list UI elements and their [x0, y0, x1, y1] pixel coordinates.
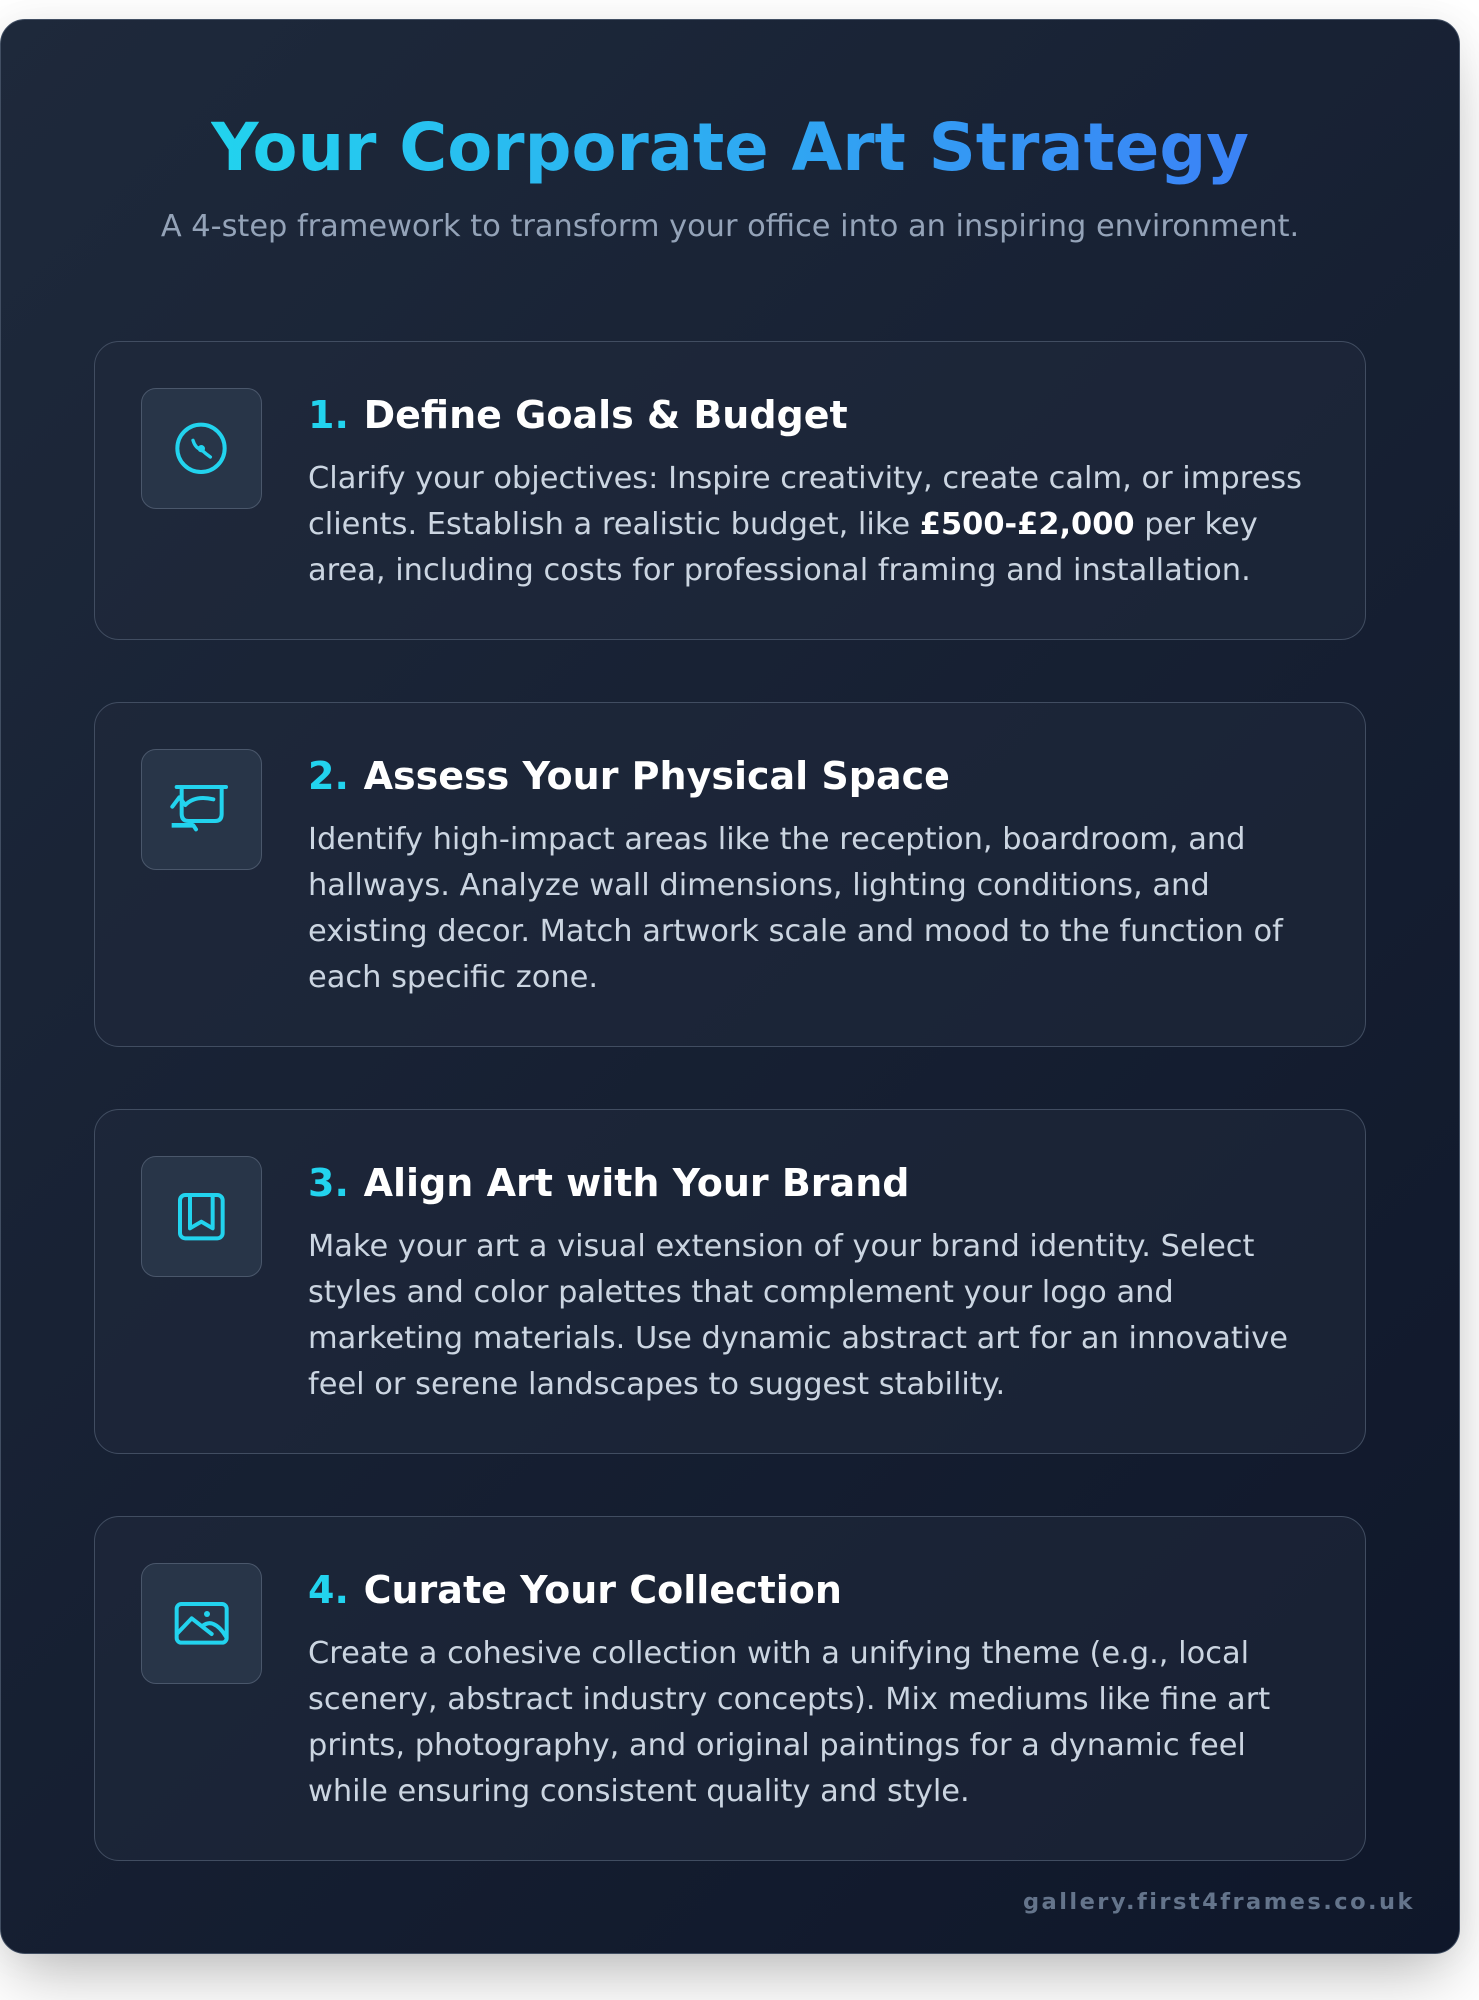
step 4 text	[308, 1636, 1270, 1809]
step 2 heading: 2. Assess Your Physical Space	[308, 754, 950, 798]
footer source: gallery.first4frames.co.uk	[1023, 1888, 1415, 1914]
icon box: step 3	[141, 1156, 262, 1277]
panel: step 2	[94, 702, 1366, 1047]
icon: landscape picture	[174, 1602, 229, 1645]
step 3 text: feel or serene landscapes to suggest stability.	[308, 1367, 1005, 1402]
step 4 text: Create a cohesive collection with a unifying theme (e.g., local	[308, 1636, 1249, 1671]
step 3 text: Make your art a visual extension of your brand identity. Select	[308, 1229, 1254, 1264]
step 2 text: each specific zone.	[308, 960, 598, 995]
panel: step 3	[94, 1108, 1366, 1454]
icon: clock handset	[175, 422, 227, 474]
step 4 text: while ensuring consistent quality and style.	[308, 1774, 970, 1809]
step 3 text: marketing materials. Use dynamic abstract art for an innovative	[308, 1321, 1288, 1356]
step 2 text: hallways. Analyze wall dimensions, lighting conditions, and	[308, 868, 1210, 903]
icon box: step 2	[141, 749, 262, 870]
icon box: step 1	[141, 388, 262, 509]
step 2 text	[308, 822, 1284, 995]
step 1 heading: 1. Define Goals & Budget	[308, 393, 848, 437]
step 4 heading: 4. Curate Your Collection	[308, 1568, 842, 1612]
panel: step 4	[94, 1516, 1366, 1860]
step 1 text: clients. Establish a realistic budget, like £500-£2,000 per key	[308, 507, 1258, 542]
subtitle: A 4-step framework to transform your office into an inspiring environment.	[161, 208, 1299, 244]
icon: bookmark	[178, 1193, 225, 1240]
step 2 text: existing decor. Match artwork scale and mood to the function of	[308, 914, 1283, 949]
title: Your Corporate Art Strategy	[211, 110, 1249, 186]
step 3 text: styles and color palettes that complement your logo and	[308, 1275, 1174, 1310]
step 3 text	[308, 1229, 1288, 1402]
icon box: step 4	[141, 1563, 262, 1684]
step 4 text: prints, photography, and original paintings for a dynamic feel	[308, 1728, 1246, 1763]
step 1 text	[308, 461, 1302, 588]
step 3 heading: 3. Align Art with Your Brand	[308, 1161, 909, 1205]
step 2 text: Identify high-impact areas like the reception, boardroom, and	[308, 822, 1245, 857]
panel: step 1	[94, 340, 1366, 640]
step 4 text: scenery, abstract industry concepts). Mix mediums like fine art	[308, 1682, 1270, 1717]
icon: presentation board	[170, 785, 228, 832]
step 1 text: Clarify your objectives: Inspire creativity, create calm, or impress	[308, 461, 1302, 496]
step 1 text: area, including costs for professional framing and installation.	[308, 553, 1251, 588]
